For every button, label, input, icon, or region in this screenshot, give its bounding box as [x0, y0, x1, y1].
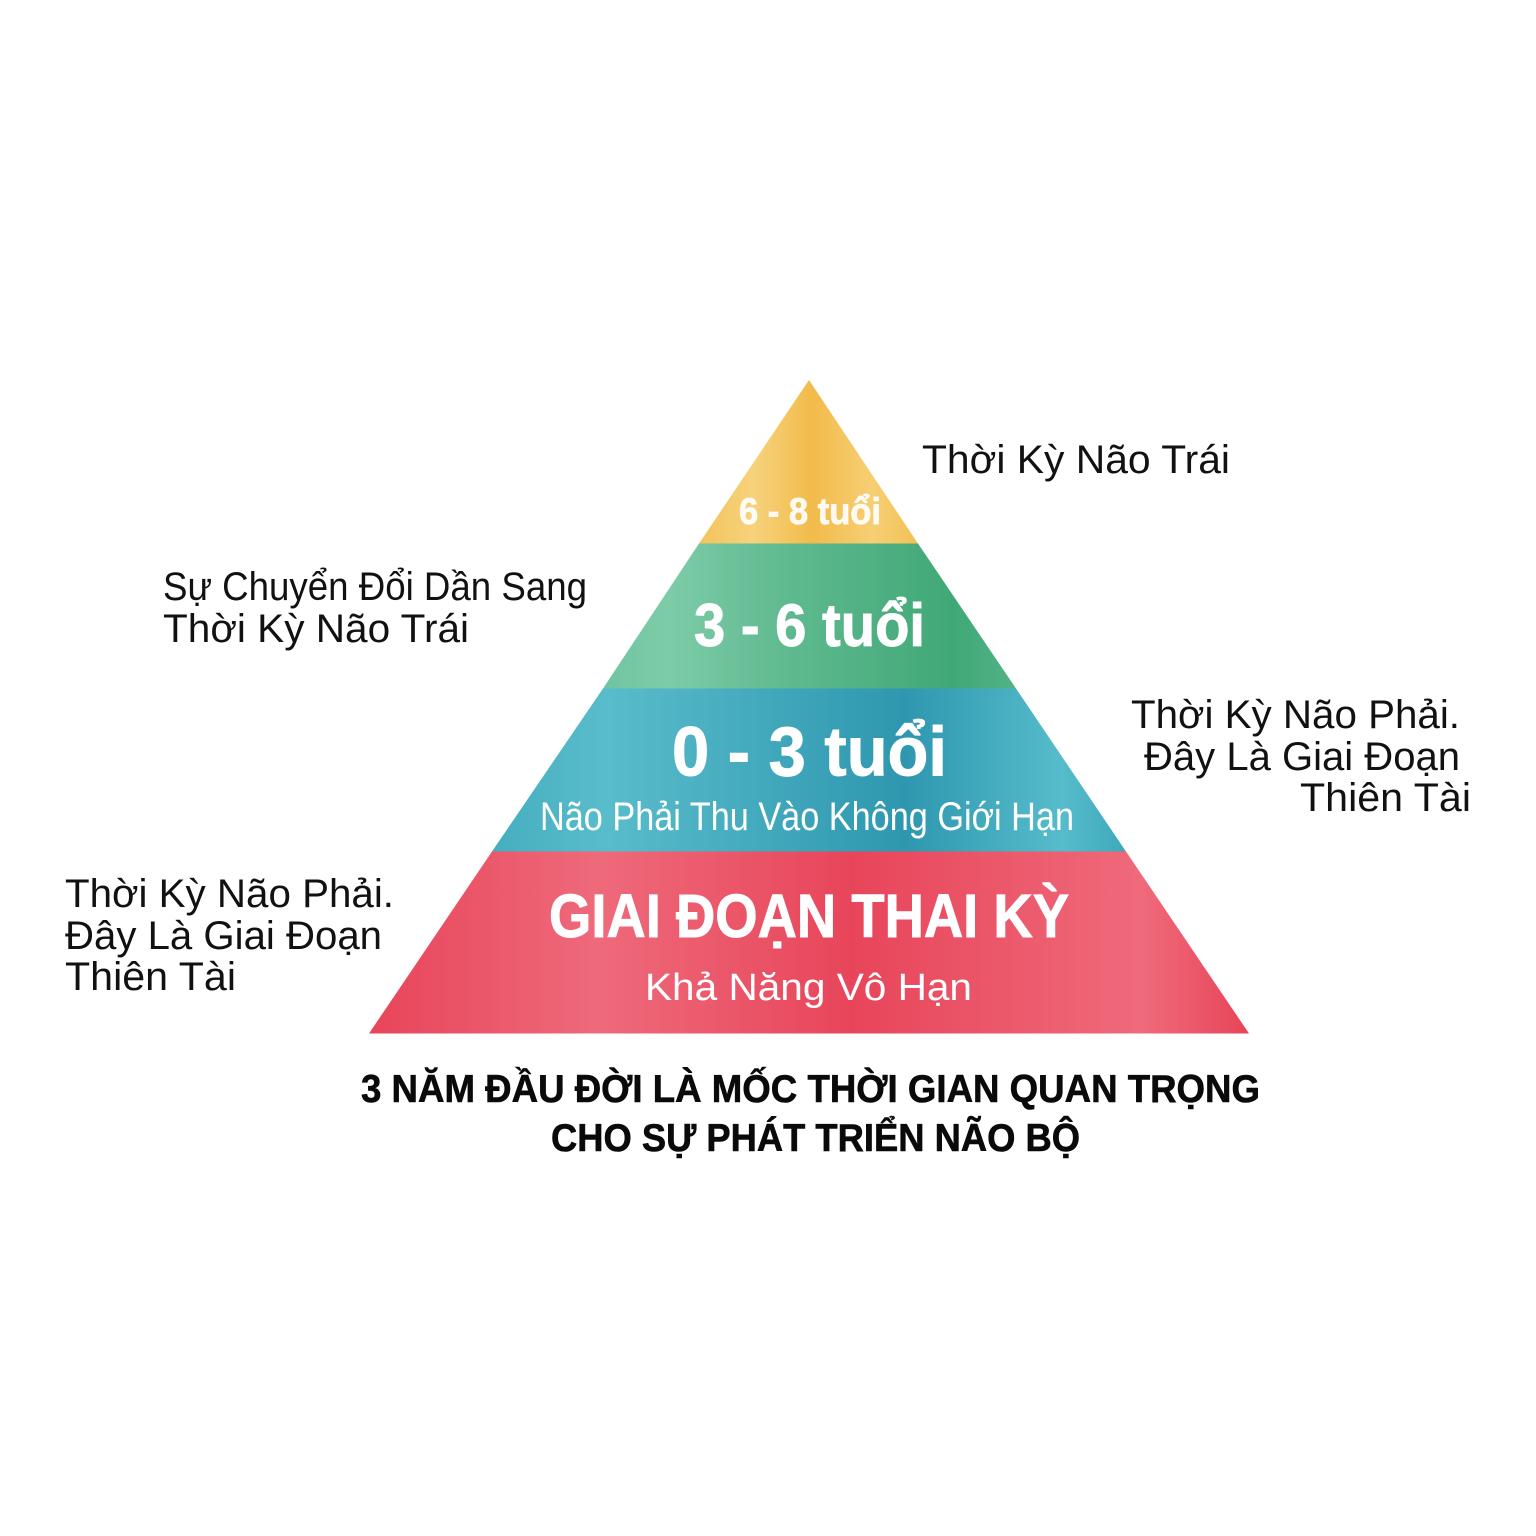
annotation: 3-6 years: [163, 565, 587, 651]
annotation: 3-6 years: Sự Chuyển Đổi Dần Sang: [163, 565, 587, 609]
pyramid tier: pregnancy: [369, 852, 1249, 1034]
pyramid tier: 6-8 years: [699, 380, 918, 544]
tier label: 0 - 3 tuổi: 0 - 3 tuổi: [672, 712, 947, 790]
annotation: 0-3 years: Thời Kỳ Não Phải.: [1131, 693, 1460, 737]
tier sublabel: Não Phải Thu Vào Không Giới Hạn: [540, 795, 1074, 839]
tier label: Giai đoạn thai kỳ: GIAI ĐOẠN THAI KỲ: [549, 882, 1069, 950]
tier label: 6 - 8 tuổi: 6 - 8 tuổi: [739, 491, 881, 532]
pyramid tier: 0-3 years: [492, 688, 1126, 852]
conclusion caption: [361, 1066, 1260, 1160]
conclusion caption: 3 NĂM ĐẦU ĐỜI LÀ MỐC THỜI GIAN QUAN TRỌNG: [361, 1066, 1260, 1111]
tier label: 3 - 6 tuổi: 3 - 6 tuổi: [694, 592, 925, 659]
pyramid tier: 3-6 years: [603, 544, 1016, 688]
annotation: 6-8 years: Thời Kỳ Não Trái: [922, 438, 1230, 482]
conclusion caption: CHO SỰ PHÁT TRIỂN NÃO BỘ: [551, 1115, 1080, 1160]
annotation: 3-6 years: Thời Kỳ Não Trái: [163, 607, 469, 651]
annotation: 0-3 years: Đây Là Giai Đoạn: [1144, 735, 1460, 779]
annotation: 0-3 years: Thiên Tài: [1300, 776, 1471, 820]
annotation: pregnancy: [65, 872, 394, 999]
annotation: pregnancy: Thiên Tài: [65, 955, 236, 999]
annotation: pregnancy: Đây Là Giai Đoạn: [65, 914, 382, 958]
annotation: 0-3 years: [1131, 693, 1471, 820]
tier sublabel: Khả Năng Vô Hạn: [645, 967, 972, 1009]
annotation: pregnancy: Thời Kỳ Não Phải.: [65, 872, 394, 916]
